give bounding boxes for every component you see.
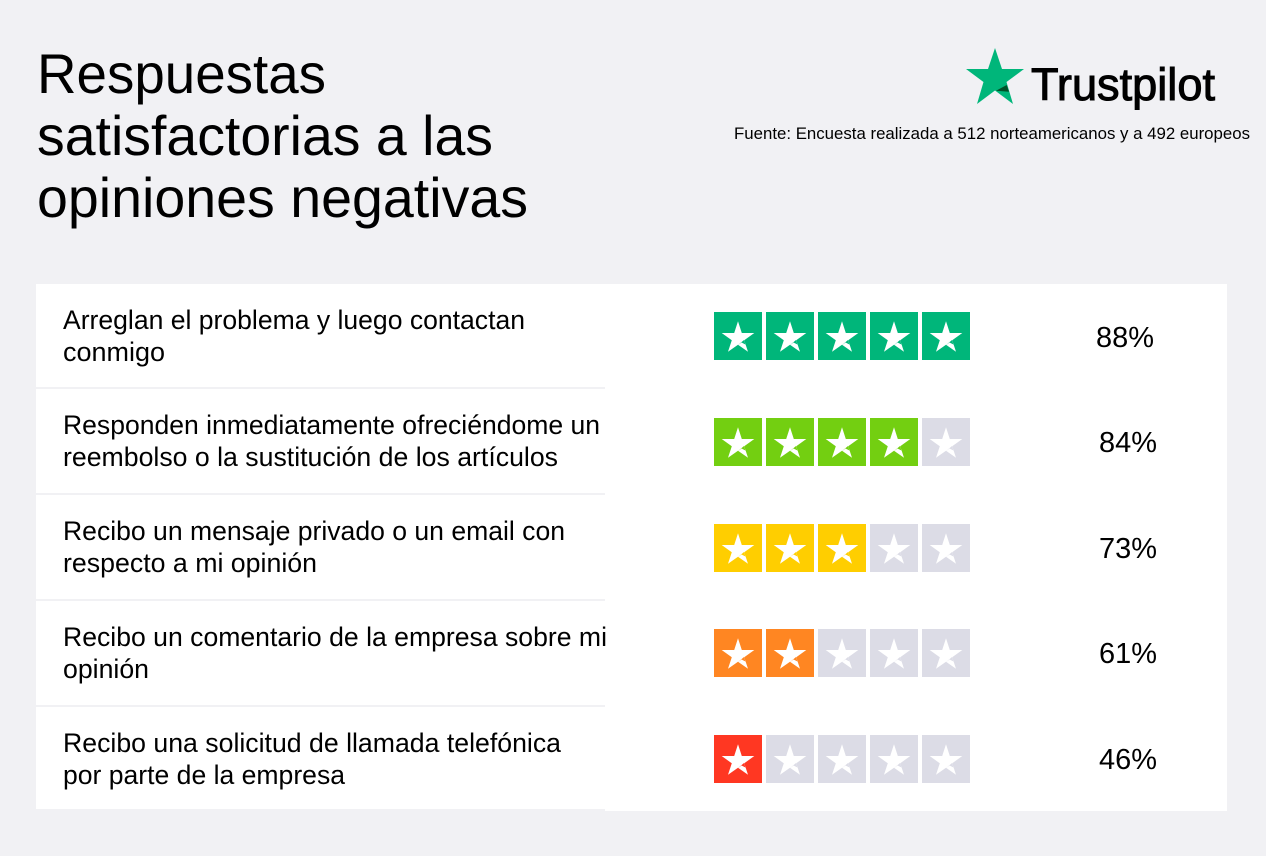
row 2 value: 84%: [1099, 427, 1157, 459]
source note: Fuente: Encuesta realizada a 512 norteamericanos y a 492 europeos: [734, 125, 1250, 143]
row 5 label: por parte de la empresa: [63, 760, 346, 790]
row 3 label: [63, 516, 565, 578]
panel: ratings table: [36, 284, 1227, 811]
row 3 label: Recibo un mensaje privado o un email con: [63, 516, 565, 546]
row 5 value: 46%: [1099, 744, 1157, 776]
row 4 stars: two orange: [714, 629, 970, 677]
row 2: [63, 410, 1157, 472]
row 1 label: conmigo: [63, 337, 165, 367]
row 2 label: Responden inmediatamente ofreciéndome un: [63, 410, 600, 440]
row 5 label: Recibo una solicitud de llamada telefónica: [63, 728, 562, 758]
row 4 value: 61%: [1099, 638, 1157, 670]
row 3 label: respecto a mi opinión: [63, 548, 317, 578]
row 1 label: [63, 305, 525, 367]
logo: Trustpilot: Trustpilot: [1031, 59, 1215, 110]
row 5 label: [63, 728, 562, 790]
icon: Trustpilot star: [966, 48, 1024, 104]
title: [37, 42, 528, 229]
row 2 label: reembolso o la sustitución de los artículos: [63, 442, 558, 472]
row 5 stars: one red: [714, 735, 970, 783]
row 2 label: [63, 410, 600, 472]
row 3 stars: three yellow: [714, 524, 970, 572]
row 1 label: Arreglan el problema y luego contactan: [63, 305, 525, 335]
row 1 stars: five green: [714, 312, 970, 360]
row 4 label: Recibo un comentario de la empresa sobre mi: [63, 622, 607, 652]
row 4 label: opinión: [63, 654, 149, 684]
row 5: [63, 728, 1157, 790]
title: opiniones negativas: [37, 166, 528, 229]
row 1 value: 88%: [1096, 322, 1154, 354]
row 2 stars: four lime: [714, 418, 970, 466]
row 1: [63, 305, 1154, 367]
row 4: [63, 622, 1157, 684]
title: satisfactorias a las: [37, 104, 493, 167]
title: Respuestas: [37, 42, 326, 105]
row 3: [63, 516, 1157, 578]
row 3 value: 73%: [1099, 533, 1157, 565]
row 4 label: [63, 622, 607, 684]
logo: Trustpilot: [966, 48, 1215, 110]
